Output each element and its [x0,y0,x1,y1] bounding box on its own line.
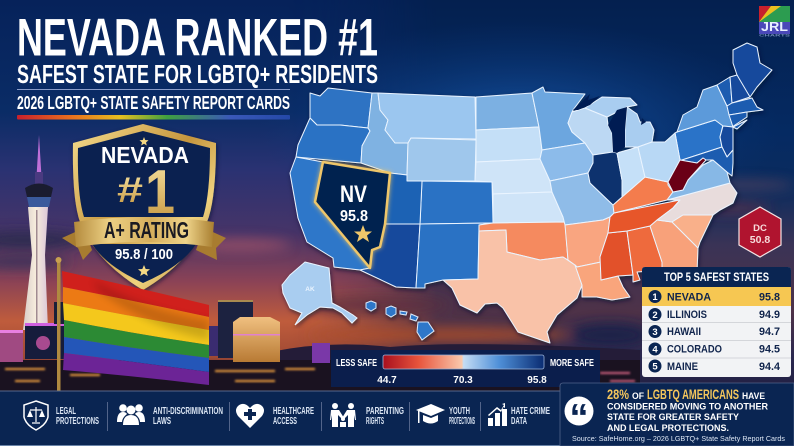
row 4: Colorado: COLORADO [667,344,722,356]
label: anti-discrimination laws: LAWS [153,416,171,427]
map: Nevada highlight [315,162,390,268]
row 4: Colorado: 4 [652,344,658,356]
legend: safety color scale: MORE SAFE [550,358,594,369]
shield badge: Nevada #1 A+ rating: # [117,171,143,210]
text: statistic [607,387,768,434]
callout: 28% quote panel [560,383,794,446]
skyline: Stratosphere tower [23,135,53,330]
row 5: Maine: 94.4 [759,361,781,373]
label: youth protections: YOUTH [449,406,470,417]
legend: safety color scale [331,350,600,387]
logo: JRL Charts [759,6,791,38]
label: parenting rights [366,406,404,427]
label: legal protections [56,406,99,427]
shield badge: Nevada #1 A+ rating: A+ RATING [104,217,189,243]
icon: family parenting [330,403,356,427]
shield badge: Nevada #1 A+ rating: NEVADA [101,142,189,168]
label: anti-discrimination laws [153,406,223,427]
row 5: Maine: 5 [652,362,658,372]
row 1: Nevada: 1 [652,292,658,303]
shield badge: Nevada #1 A+ rating: 1 [145,158,175,227]
row 2: Illinois: ILLINOIS [667,309,707,321]
shield badge: Nevada #1 A+ rating [62,124,226,290]
map: Alaska: AK [305,286,315,293]
map: Nevada highlight: 95.8 [340,208,368,225]
bottom bar: policy categories [0,390,794,446]
source line: Source: SafeHome.org – 2026 LGBTQ+ State Safety Report Cards [572,434,785,443]
label: youth protections [449,406,475,427]
label: parenting rights: RIGHTS [366,416,384,427]
icon: healthcare heart [236,404,264,428]
subtitle: SAFEST STATE FOR LGBTQ+ RESIDENTS [17,59,378,89]
text: statistic: OF [632,391,644,402]
legend: safety color scale: LESS SAFE [336,358,377,369]
row 4: Colorado: 94.5 [759,344,780,356]
text: statistic: STATE FOR GREATER SAFETY [607,412,740,423]
row 5: Maine [648,360,781,373]
row 3: Hawaii: HAWAII [667,326,701,338]
lakes [573,94,646,153]
label: hate crime data [511,406,550,427]
badge: DC score [739,207,781,257]
row 3: Hawaii [648,325,780,338]
row 3: Hawaii: 3 [652,327,658,338]
legend: safety color scale: 44.7 [377,375,397,386]
row 1: Nevada: NEVADA [667,292,711,304]
row 1: Nevada: 95.8 [759,292,780,304]
skyline: casino buildings [0,300,635,382]
icon: hate crime chart [488,403,507,426]
label: healthcare access: ACCESS [273,416,297,427]
badge: DC score: DC [753,223,767,234]
text: statistic: 28% [607,387,629,402]
logo: JRL Charts: CHARTS [759,32,791,38]
text: statistic: HAVE [742,391,765,402]
legend: safety color scale: 95.8 [527,375,547,386]
map: contiguous US states [290,43,772,343]
text: statistic: AND LEGAL PROTECTIONS. [607,423,729,434]
panel: top 5 safest states: TOP 5 SAFEST STATES [664,270,769,284]
row 2: Illinois: 94.9 [759,309,780,321]
icon: people group [117,404,145,425]
row 4: Colorado [648,342,780,356]
label: parenting rights: PARENTING [366,406,404,417]
logo: JRL Charts: JRL [761,19,788,34]
legend: safety color scale: 70.3 [453,375,473,386]
label: healthcare access: HEALTHCARE [273,406,314,417]
divider and report label: 2026 LGBTQ+ STATE SAFETY REPORT CARDS [17,93,290,113]
label: healthcare access [273,406,314,427]
label: legal protections: PROTECTIONS [56,416,99,427]
shield badge: Nevada #1 A+ rating: 95.8 / 100 [115,246,173,263]
icon: quotation marks [564,396,594,439]
row 1: Nevada [648,290,780,304]
flag: rainbow pride flag on pole [56,257,209,392]
icon: legal protections shield [24,401,48,430]
label: hate crime data: DATA [511,416,527,427]
icon: graduation cap [416,404,445,424]
row 2: Illinois [648,308,780,321]
text: statistic: LGBTQ AMERICANS [647,387,739,402]
map: Alaska [282,262,357,325]
title: main heading: NEVADA RANKED #1 [17,8,378,68]
text: statistic: CONSIDERED MOVING TO ANOTHER [607,402,768,412]
badge: DC score: 50.8 [750,234,770,246]
label: hate crime data: HATE CRIME [511,406,550,417]
row 3: Hawaii: 94.7 [759,326,780,338]
bottom bar: policy categories: PROTECTIONS [449,416,475,427]
panel: top 5 safest states [642,267,791,377]
map: Hawaii [366,301,434,340]
row 5: Maine: MAINE [667,361,698,373]
label: anti-discrimination laws: ANTI-DISCRIMINATION [153,406,223,417]
icon: quotation marks: “ [570,397,588,439]
rainbow bar [17,115,290,120]
map: Nevada highlight: NV [340,181,367,208]
label: legal protections: LEGAL [56,406,76,417]
row 2: Illinois: 2 [652,310,658,321]
